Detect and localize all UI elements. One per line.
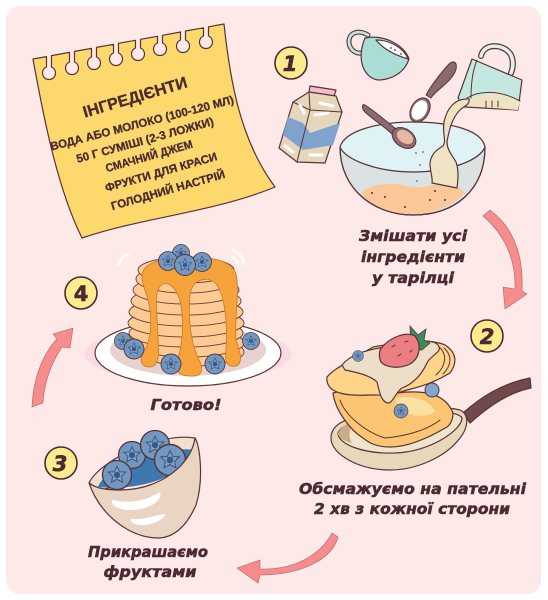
- icon: spoon with mix: [362, 105, 420, 153]
- ingredient list: ГОЛОДНИЙ НАСТРІЙ: [110, 168, 227, 213]
- note paper: [33, 24, 275, 238]
- icon: bowl: [340, 122, 485, 215]
- note title: ІНГРЕДІЄНТИ: [81, 74, 189, 121]
- badge: step 1: [275, 47, 307, 79]
- icon: blueberries: [114, 244, 260, 374]
- icon: pancakes: [128, 257, 244, 366]
- ingredient list: ФРУКТИ ДЛЯ КРАСИ: [104, 151, 219, 195]
- badge: step 4: 4: [74, 282, 88, 306]
- badge: step 2: 2: [480, 325, 494, 349]
- arrow: step 3 to step 4: [32, 328, 73, 407]
- badge: step 3: [45, 447, 77, 479]
- caption: step 1: інгредієнти: [361, 248, 466, 266]
- caption: step 4: Готово!: [150, 396, 222, 414]
- icon: syrup: [141, 257, 241, 376]
- icon: lower pancake: [333, 391, 453, 447]
- caption: step 2: 2 хв з кожної сторони: [314, 500, 510, 518]
- step 3 illustration: blueberry bowl: [89, 430, 201, 538]
- plate shadow: [84, 327, 292, 381]
- steam swooshes: [119, 250, 244, 264]
- icon: cream topping: [342, 341, 439, 403]
- icon: pan: [331, 408, 467, 470]
- badge: step 2: [471, 320, 503, 352]
- pouring liquid: [430, 99, 469, 188]
- step 4 illustration: pancake stack: [84, 244, 292, 386]
- icon: blueberries: [352, 350, 439, 418]
- arrow: step 2 to step 3: [237, 533, 338, 583]
- icon: pan handle: [463, 378, 531, 423]
- step 1 illustration: [279, 32, 522, 215]
- icon: spoon with flour: [406, 62, 456, 126]
- caption: step 2: [299, 480, 527, 518]
- panel: ingredients note: [33, 24, 275, 238]
- arrow: step 1 to step 2: [483, 210, 527, 309]
- icon: cup: [349, 32, 409, 80]
- icon: bowl front: [89, 438, 201, 538]
- badge: step 4: [65, 277, 97, 309]
- step 2 illustration: pan with pancakes: [327, 326, 531, 470]
- ingredient list: СМАЧНИЙ ДЖЕМ: [104, 138, 194, 175]
- caption: step 1: [359, 227, 468, 287]
- icon: strawberry: [379, 326, 430, 367]
- ingredient list: 50 Г СУМІШІ (2-3 ЛОЖКИ): [75, 116, 215, 166]
- caption: step 2: Обсмажуємо на пательні: [299, 480, 527, 498]
- icon: measuring jug: [458, 46, 522, 110]
- caption: step 3: [88, 543, 208, 581]
- caption: step 3: Прикрашаємо: [88, 543, 208, 561]
- icon: bowl back: [89, 437, 195, 490]
- ingredient list: [49, 94, 235, 213]
- badge: step 1: 1: [283, 52, 297, 76]
- badge: step 3: 3: [53, 452, 67, 476]
- icon: upper pancake: [327, 341, 455, 395]
- caption: step 3: фруктами: [104, 563, 197, 581]
- caption: step 1: у тарілці: [372, 269, 455, 287]
- icon: milk carton: [279, 86, 342, 163]
- icon: plate: [95, 320, 281, 386]
- ingredient list: ВОДА АБО МОЛОКО (100-120 МЛ): [49, 94, 235, 153]
- blueberries: [98, 430, 193, 490]
- caption: step 1: Змішати усі: [359, 227, 468, 245]
